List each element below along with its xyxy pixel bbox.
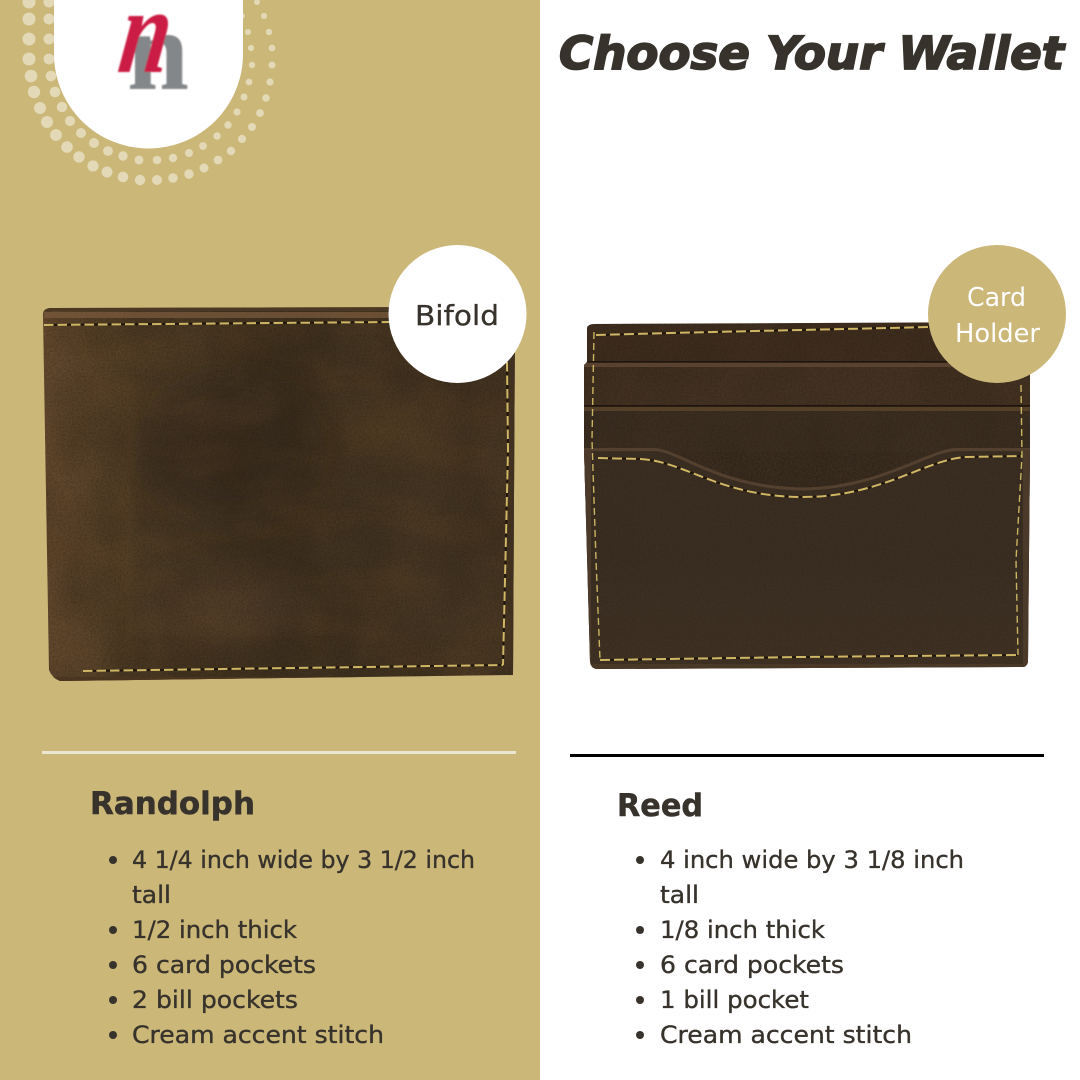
badge: Bifold: Bifold (415, 299, 499, 332)
list: Reed specs: tall (660, 881, 699, 909)
list: Reed specs: 6 card pockets (660, 951, 844, 979)
front pocket (580, 449, 1035, 672)
list: Randolph specs: 2 bill pockets (132, 986, 298, 1014)
list: Randolph specs: 4 1/4 inch wide by 3 1/2 inch (132, 846, 475, 874)
stitching (596, 327, 1022, 660)
list: Randolph specs (109, 846, 475, 1049)
list: Reed specs: 4 inch wide by 3 1/8 inch (660, 846, 964, 874)
stitching (44, 322, 508, 671)
divider: right (570, 754, 1044, 757)
badge: Card Holder: Card (967, 283, 1026, 313)
wallet: Randolph bifold (40, 305, 520, 685)
title: Choose Your Wallet (559, 27, 1066, 80)
list: Randolph specs: 1/2 inch thick (132, 916, 297, 944)
list: Reed specs: 1 bill pocket (660, 986, 809, 1014)
list: Randolph specs: 6 card pockets (132, 951, 316, 979)
list: Reed specs: Cream accent stitch (660, 1021, 912, 1049)
heading: Randolph: Randolph (90, 786, 255, 822)
divider: left (42, 751, 516, 754)
wallet: Reed card holder (580, 320, 1035, 672)
heading: Reed: Reed (617, 788, 703, 824)
spec block: Randolph (90, 786, 475, 1049)
list: Randolph specs: tall (132, 881, 171, 909)
spec block: Reed (617, 788, 964, 1049)
badge: Bifold (388, 245, 526, 383)
badge: Card Holder: Holder (955, 319, 1040, 349)
panel: left background (0, 0, 540, 1080)
list: Reed specs (636, 846, 964, 1049)
list: Reed specs: 1/8 inch thick (660, 916, 825, 944)
logo badge (54, 0, 243, 148)
list: Randolph specs: Cream accent stitch (132, 1021, 384, 1049)
decorative dotted rings (22, 0, 276, 185)
badge: Card Holder (928, 245, 1066, 383)
